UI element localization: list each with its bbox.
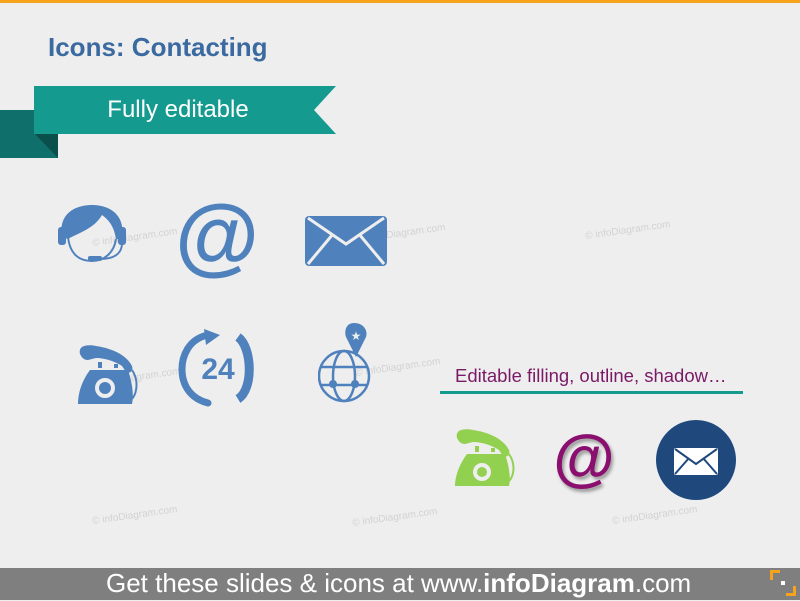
text: © infoDiagram.com — [360, 222, 446, 245]
subtitle: editable filling: Editable filling, outline, shadow… — [455, 365, 726, 386]
text: © infoDiagram.com — [92, 504, 178, 527]
text: © infoDiagram.com — [92, 226, 178, 249]
footer bar: Get these slides & icons at www.infoDiagram.com — [106, 568, 691, 598]
icon: purple at sign: @ — [553, 423, 615, 493]
icon: envelope in circle — [656, 420, 736, 500]
subtitle: editable filling — [440, 365, 743, 394]
icon: 24 hours — [178, 329, 254, 406]
footer bar — [0, 568, 800, 600]
icon: green phone — [455, 429, 514, 486]
text: © infoDiagram.com — [95, 366, 181, 389]
text: © infoDiagram.com — [612, 504, 698, 527]
text: © infoDiagram.com — [355, 356, 441, 379]
icon: 24 hours: 24 — [201, 353, 235, 386]
icon: at sign: @ — [175, 188, 259, 284]
icon: headset operator — [58, 205, 126, 262]
text: © infoDiagram.com — [585, 219, 671, 242]
title: Icons: Contacting — [48, 32, 268, 62]
icon: globe with pin: ★ — [351, 329, 361, 343]
icon: globe with pin — [318, 323, 370, 402]
text: © infoDiagram.com — [352, 506, 438, 529]
icon: retro phone — [78, 345, 138, 404]
icon: logo corners — [770, 570, 796, 596]
banner: fully editable — [0, 86, 336, 158]
icon: envelope — [305, 216, 387, 266]
banner: fully editable: Fully editable — [107, 96, 249, 123]
